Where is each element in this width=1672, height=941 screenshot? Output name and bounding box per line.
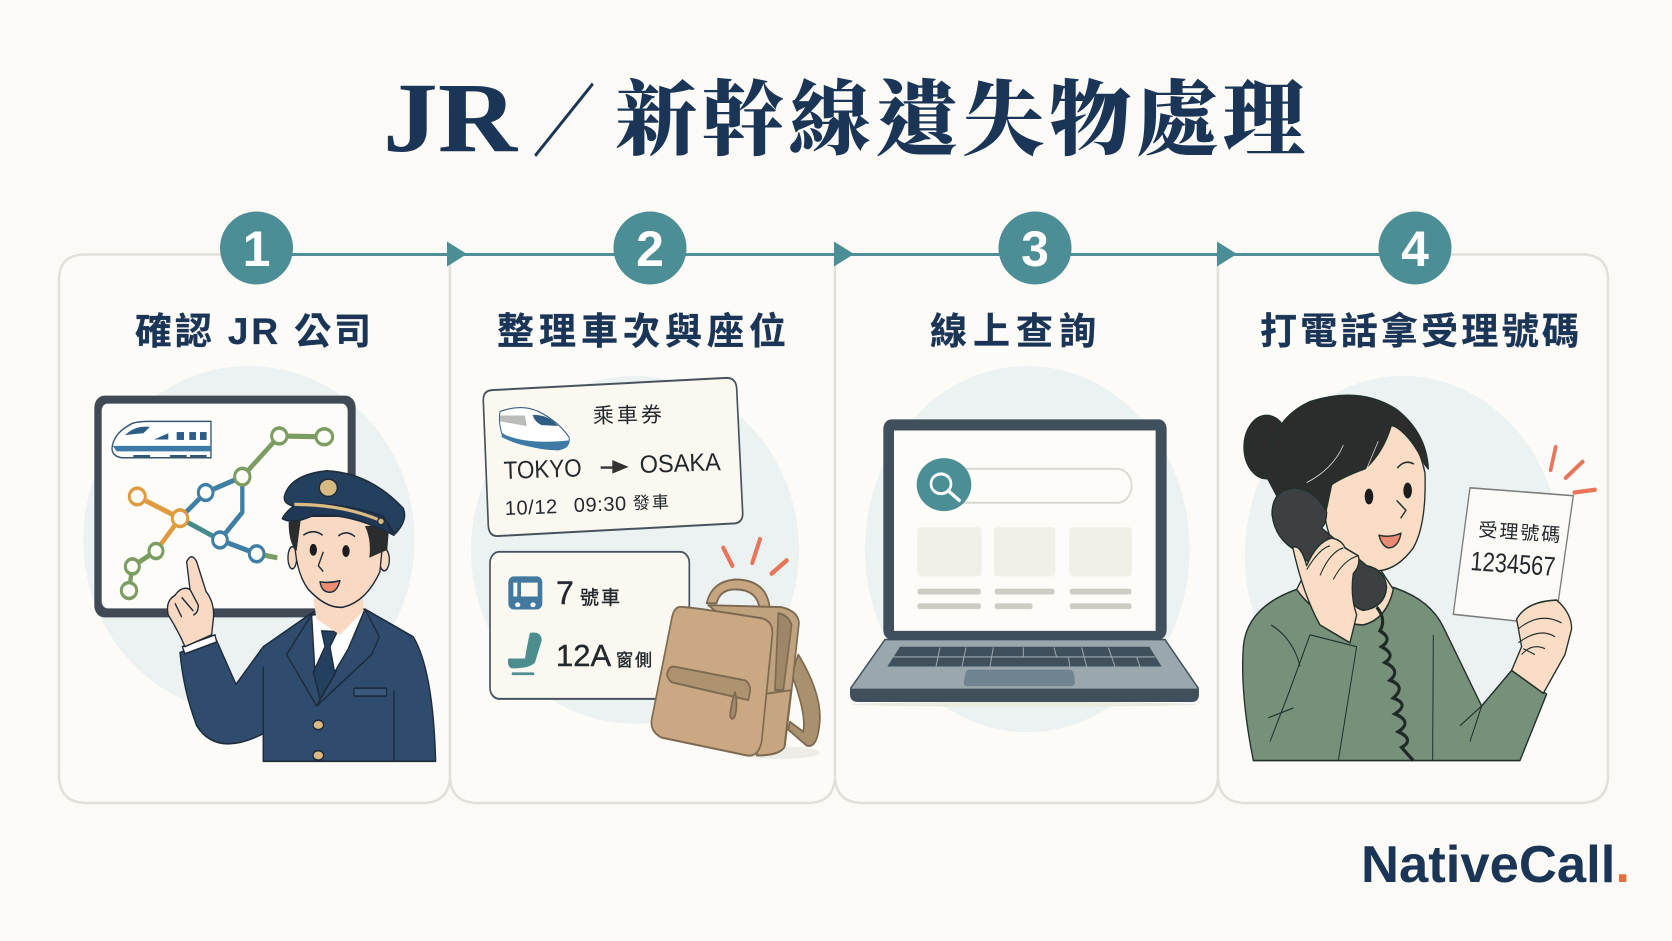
reference note xyxy=(1453,488,1573,621)
badge 3: 3 xyxy=(1021,221,1049,277)
illustration: laptop with search page xyxy=(851,366,1198,732)
heading: step 4: 打電話拿受理號碼 xyxy=(1260,310,1579,352)
seat text: 7 xyxy=(556,575,574,611)
route map board xyxy=(94,396,356,617)
ticket text: 發車 xyxy=(632,493,671,513)
seat text: 窗側 xyxy=(616,651,654,670)
title: JR xyxy=(383,62,519,173)
badge 1 xyxy=(220,212,293,284)
connector line between steps xyxy=(256,253,1415,256)
panel: step 1 confirm JR company xyxy=(59,254,450,803)
hand pointing xyxy=(182,635,217,654)
title xyxy=(383,62,1305,173)
seat text: 號車 xyxy=(580,587,622,609)
alert marks xyxy=(1551,447,1595,493)
logo: NativeCall: NativeCall. xyxy=(1361,836,1630,894)
illustration: conductor and route map xyxy=(83,366,436,761)
panel: step 4 call for reference number xyxy=(1218,254,1608,803)
laptop screen xyxy=(883,419,1167,640)
backpack xyxy=(651,579,820,759)
icon: train carriage xyxy=(508,576,542,610)
seat card xyxy=(490,552,689,699)
panel: step 2 organise train and seat xyxy=(450,254,835,803)
eyes, nose, mouth xyxy=(1365,489,1373,504)
icon: search magnifier xyxy=(917,458,971,511)
heading: step 2: 整理車次與座位 xyxy=(497,311,786,352)
badge 2 xyxy=(614,212,686,284)
arrow: step 2 to 3 xyxy=(834,242,854,266)
telephone handset xyxy=(1272,488,1387,610)
conductor figure xyxy=(167,471,436,761)
badge 3 xyxy=(998,212,1072,284)
note text: 受理號碼 xyxy=(1478,519,1563,547)
laptop base xyxy=(851,640,1198,701)
icon: shinkansen side view xyxy=(112,421,211,459)
ticket text: OSAKA xyxy=(639,448,721,479)
badge 2: 2 xyxy=(636,221,664,277)
seat text: 12A xyxy=(556,638,611,673)
note text xyxy=(1470,519,1563,582)
alert marks xyxy=(723,539,787,574)
result tiles xyxy=(917,527,1132,576)
heading: step 3: 線上查詢 xyxy=(930,311,1096,352)
icon: seat xyxy=(508,633,542,675)
icon: shinkansen front view xyxy=(499,408,569,450)
illustration: woman on phone with note xyxy=(1243,376,1595,761)
hand holding note xyxy=(1512,600,1572,693)
ticket card xyxy=(483,378,743,536)
hand on phone xyxy=(1293,538,1359,643)
title: ／ xyxy=(532,78,596,168)
ticket text: 09:30 xyxy=(573,493,627,517)
ticket text: TOKYO xyxy=(503,454,582,485)
face xyxy=(1324,425,1425,571)
arrow: step 3 to 4 xyxy=(1217,242,1237,266)
heading: step 1: 確認 JR 公司 xyxy=(135,311,371,352)
sweater xyxy=(1243,587,1547,761)
result text lines xyxy=(917,589,1132,609)
badge 4: 4 xyxy=(1401,221,1429,277)
badge 1: 1 xyxy=(243,221,270,277)
ticket text xyxy=(503,404,721,520)
badge 4 xyxy=(1378,212,1452,284)
panel: step 3 search online xyxy=(835,254,1218,803)
ticket text: 10/12 xyxy=(504,496,558,520)
neck xyxy=(1297,564,1393,625)
arrow: step 1 to 2 xyxy=(447,242,467,266)
illustration: ticket, seat card and bag xyxy=(471,376,820,759)
seat text xyxy=(556,575,654,673)
phone cord xyxy=(1377,607,1413,761)
note text: 1234567 xyxy=(1470,546,1556,582)
hair xyxy=(1244,415,1289,479)
route network xyxy=(121,428,333,598)
title: 新幹線遺失物處理 xyxy=(615,75,1305,166)
ticket text: 乘車券 xyxy=(593,404,665,428)
